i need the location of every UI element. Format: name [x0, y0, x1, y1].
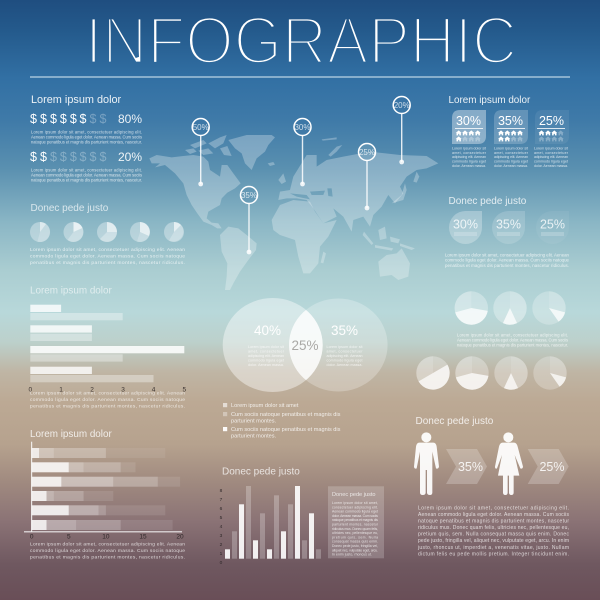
drop 25%: 25%	[540, 218, 565, 232]
y axis labels: 2	[220, 542, 223, 548]
y axis labels: 1	[220, 551, 223, 557]
dollar row 80%	[30, 112, 142, 126]
text block	[31, 168, 142, 182]
text block: natoque penatibus et magnis dis parturient montes, nascetur	[418, 519, 569, 525]
text block: Aenean commodo ligula eget dolor. Aenean massa. Cum sociis	[457, 338, 568, 342]
axis labels: 5	[182, 386, 186, 394]
text block: ridiculus mus. Donec quam felis, ultricies nec, pellentesque eu,	[418, 525, 569, 531]
dollar row 80%: $	[40, 112, 47, 126]
card captions: adipiscing elit. Aenean	[494, 155, 528, 159]
card captions: Lorem ipsum dolor sit	[494, 146, 528, 150]
text block	[30, 542, 185, 561]
venn circles	[223, 298, 388, 392]
text block: Lorem ipsum dolor sit amet, consectetuer adipiscing elit. Aenean	[445, 252, 570, 258]
side note box: consequat massa quis enim.	[332, 540, 378, 544]
text block: penatibus et magnis dis parturient montes, nascetur ridiculus.	[445, 263, 569, 268]
card captions: adipiscing elit. Aenean	[534, 155, 568, 159]
map pin 50%: 50%	[193, 123, 209, 132]
card captions: Lorem ipsum dolor sit	[452, 146, 486, 150]
venn captions: dolor. Aenean massa.	[326, 363, 362, 367]
heading: stacked bars: Lorem ipsum dolor	[30, 429, 112, 440]
y axis labels: 6	[220, 506, 223, 512]
y axis labels: 7	[220, 497, 223, 503]
venn legend: Lorem ipsum dolor sit amet	[231, 403, 299, 409]
axis labels: 1	[59, 386, 63, 394]
text block	[30, 390, 185, 410]
venn captions: Lorem ipsum dolor sit	[248, 345, 284, 349]
dollar row 80%: $	[70, 112, 77, 126]
text block: Lorem ipsum dolor sit amet, consectetuer adipiscing elit. Aenean	[30, 247, 185, 253]
venn legend: Cum sociis natoque penatibus et magnis dis	[231, 412, 341, 418]
venn captions: amet, consectetuer	[326, 350, 363, 354]
panel: drop shapes	[445, 196, 570, 268]
dollar row 20%: $	[70, 150, 77, 164]
venn legend: parturient montes.	[231, 434, 277, 440]
text block: pede justo, fringilla vel, aliquet nec, vulputate eget, arcu. In enim	[418, 538, 569, 544]
text block: Lorem ipsum dolor sit amet, consectetuer adipiscing elit.	[418, 506, 569, 512]
icon: woman	[495, 432, 523, 495]
card 25%: 25%	[539, 114, 564, 128]
dollar row 20%: $	[90, 150, 97, 164]
heading: drop shapes: Donec pede justo	[448, 196, 527, 207]
dollar row 20%: $	[30, 150, 37, 164]
text block: commodo ligula eget dolor. Aenean massa. Cum sociis natoque	[445, 258, 570, 262]
panel: house cards	[448, 95, 569, 168]
venn captions: commodo ligula eget	[326, 358, 362, 362]
dollar row 80%: $	[50, 112, 57, 126]
text block: Lorem ipsum dolor sit amet, consectetuer adipiscing elit.	[31, 168, 142, 172]
side note box: pretium quis, sem. Nulla	[332, 535, 378, 539]
map pin 30%: 30%	[294, 123, 311, 132]
panel: venn diagram	[223, 298, 388, 440]
venn legend: parturient montes.	[231, 418, 277, 424]
y axis labels: 8	[220, 488, 223, 494]
side note box: Donec pede justo, fringilla vel,	[332, 544, 378, 548]
dollar row 80%: $	[90, 112, 97, 126]
axis labels	[30, 534, 184, 540]
drop 30%: 30%	[453, 218, 478, 232]
axis labels: 0	[28, 386, 32, 394]
venn captions: commodo ligula eget	[248, 358, 284, 362]
y axis labels: 0	[220, 560, 223, 566]
venn captions: Lorem ipsum dolor sit	[326, 345, 362, 349]
heading: column chart: Donec pede justo	[222, 466, 300, 478]
panel: small pies	[30, 203, 185, 266]
y axis labels: 4	[220, 524, 223, 530]
dollar row 20%: 20%	[118, 150, 142, 164]
arrow 25%: 25%	[539, 460, 565, 474]
text block	[31, 130, 142, 144]
heading: horizontal bars: Lorem ipsum dolor	[30, 286, 112, 296]
panel: stacked bars	[24, 429, 185, 561]
text block: natoque penatibus et magnis dis parturient montes, nascetur.	[31, 178, 142, 182]
venn captions: dolor. Aenean massa.	[248, 363, 284, 367]
axis labels: 10	[102, 534, 110, 540]
side note box: dolor. Aenean massa. Cum sociis	[332, 514, 378, 518]
side note box: Lorem ipsum dolor sit amet,	[332, 501, 378, 505]
bar chart	[30, 305, 184, 382]
side note box: In enim justo, rhoncus ut.	[332, 553, 372, 557]
axis labels: 5	[67, 534, 71, 540]
venn legend	[223, 403, 341, 440]
dollar row 80%: $	[60, 112, 67, 126]
text block	[417, 506, 570, 557]
text block: natoque penatibus et magnis dis parturient montes, nascetur.	[31, 140, 142, 144]
side note box: Donec pede justo	[332, 492, 376, 498]
map pin 35%	[240, 186, 258, 254]
venn legend: Cum sociis natoque penatibus et magnis dis	[231, 427, 341, 433]
side note box: ridiculus mus. Donec quam felis,	[332, 527, 378, 531]
text block: Lorem ipsum dolor sit amet, consectetuer adipiscing elit. Aenean	[30, 390, 185, 396]
text block: commodo ligula eget dolor. Aenean massa. Cum sociis natoque	[30, 254, 185, 260]
heading: gender stats: Donec pede justo	[416, 416, 494, 427]
world map	[149, 135, 438, 290]
heading: house cards: Lorem ipsum dolor	[448, 95, 531, 106]
venn values: 35%	[331, 323, 358, 338]
map pin 50%	[192, 118, 209, 186]
axis labels: 4	[152, 386, 156, 394]
text block: dictum felis eu pede mollis pretium. Integer tincidunt enim.	[418, 551, 569, 557]
text block	[445, 252, 570, 268]
dollar row 80%: 80%	[118, 112, 142, 126]
side note box: parturient montes, nascetur	[332, 522, 379, 526]
axis labels	[28, 386, 186, 394]
y axis labels	[220, 488, 223, 566]
text block: pretium quis, sem. Nulla consequat massa quis enim. Donec	[418, 532, 570, 538]
card captions: dolor. Aenean massa.	[452, 164, 486, 168]
card captions: commodo ligula eget	[452, 160, 486, 164]
panel: large pies	[416, 291, 568, 390]
venn captions: amet, consectetuer	[248, 350, 285, 354]
text block: Lorem ipsum dolor sit amet, consectetuer adipiscing elit. Aenean	[30, 542, 185, 548]
card captions: Lorem ipsum dolor sit	[534, 146, 568, 150]
panel: horizontal bars	[28, 286, 186, 410]
text block: Aenean commodo ligula eget dolor. Aenean massa. Cum sociis	[31, 172, 142, 178]
text block: commodo ligula eget dolor. Aenean massa. Cum sociis natoque	[30, 548, 185, 554]
text block: Lorem ipsum dolor sit amet, consectetuer adipiscing elit.	[31, 130, 142, 134]
card captions	[452, 146, 569, 168]
text block: penatibus et magnis dis parturient montes, nascetur ridiculus.	[30, 260, 185, 266]
pie row two	[416, 356, 567, 390]
card captions: amet, consectetuer	[534, 151, 569, 155]
dollar row 20%: $	[80, 150, 87, 164]
venn values: 25%	[291, 338, 319, 353]
side note box: natoque penatibus et magnis dis	[332, 518, 378, 522]
text block: natoque penatibus et magnis dis parturient montes, nascetur.	[457, 342, 568, 348]
heading: currency stats: Lorem ipsum dolor	[31, 94, 122, 106]
map pin 20%	[393, 96, 410, 164]
text block	[457, 332, 568, 348]
axis labels: 0	[30, 534, 34, 540]
card 35%: 35%	[498, 114, 523, 128]
pie row one	[455, 291, 566, 325]
venn captions: adipiscing elit. Aenean	[326, 354, 362, 358]
venn captions: adipiscing elit. Aenean	[248, 354, 284, 358]
title: INFOGRAPHIC	[85, 4, 517, 78]
side note box: Aenean commodo ligula eget	[332, 510, 378, 514]
axis labels: 15	[139, 534, 147, 540]
dollar row 20%: $	[40, 150, 47, 164]
panel: column chart	[220, 466, 384, 566]
arrow 35%	[446, 449, 487, 484]
side note box: ultricies nec, pellentesque eu,	[332, 531, 378, 535]
icon: man	[414, 432, 439, 495]
pie row	[30, 222, 184, 242]
arrow 25%	[528, 449, 569, 484]
card captions: amet, consectetuer	[494, 151, 529, 155]
text block: Aenean commodo ligula eget dolor. Aenean massa. Cum sociis	[418, 512, 570, 518]
stacked bar chart	[24, 442, 182, 532]
columns	[225, 486, 321, 559]
panel: currency stats	[30, 94, 142, 182]
text block: penatibus et magnis dis parturient montes, nascetur ridiculus.	[30, 555, 185, 561]
side note box	[328, 486, 384, 558]
y axis labels: 3	[220, 533, 223, 539]
card captions: dolor. Aenean massa.	[534, 164, 568, 168]
panel: gender stats	[414, 416, 570, 557]
axis labels: 20	[176, 534, 184, 540]
dollar row 20%: $	[100, 150, 107, 164]
text block: justo, rhoncus ut, imperdiet a, venenatis vitae, justo. Nullam	[417, 545, 569, 551]
card captions: commodo ligula eget	[534, 160, 568, 164]
map pin 20%: 20%	[394, 101, 410, 110]
map pin 30%	[294, 118, 311, 186]
axis labels: 3	[121, 386, 125, 394]
text block	[30, 247, 185, 266]
dollar row 20%: $	[50, 150, 57, 164]
dollar row 80%: $	[100, 112, 107, 126]
venn values	[254, 323, 358, 353]
venn values: 40%	[254, 323, 281, 338]
drop 35%: 35%	[496, 218, 521, 232]
text block: Aenean commodo ligula eget dolor. Aenean massa. Cum sociis	[31, 134, 142, 140]
dollar row 80%: $	[80, 112, 87, 126]
dollar row 80%: $	[30, 112, 37, 126]
dollar row 20%: $	[60, 150, 67, 164]
text block: Lorem ipsum dolor sit amet, consectetuer adipiscing elit.	[457, 332, 568, 338]
y axis labels: 5	[220, 515, 223, 521]
heading: small pies: Donec pede justo	[30, 203, 109, 214]
side note box: consectetuer adipiscing elit.	[332, 505, 378, 509]
text block: penatibus et magnis dis parturient montes, nascetur ridiculus.	[30, 404, 185, 410]
map pin 25%: 25%	[359, 148, 375, 157]
card captions: dolor. Aenean massa.	[494, 164, 528, 168]
card captions: amet, consectetuer	[452, 151, 487, 155]
arrow 35%: 35%	[458, 460, 483, 474]
venn captions	[248, 345, 363, 367]
card captions: adipiscing elit. Aenean	[452, 155, 486, 159]
axis labels: 2	[90, 386, 94, 394]
side note box: aliquet nec, vulputate eget, arcu.	[332, 548, 378, 552]
card captions: commodo ligula eget	[494, 160, 528, 164]
text block: commodo ligula eget dolor. Aenean massa. Cum sociis natoque	[30, 397, 185, 403]
dollar row 20%	[30, 150, 142, 164]
card 30%: 30%	[456, 114, 481, 128]
map pin 35%: 35%	[241, 191, 257, 200]
map pin 25%	[358, 144, 376, 210]
